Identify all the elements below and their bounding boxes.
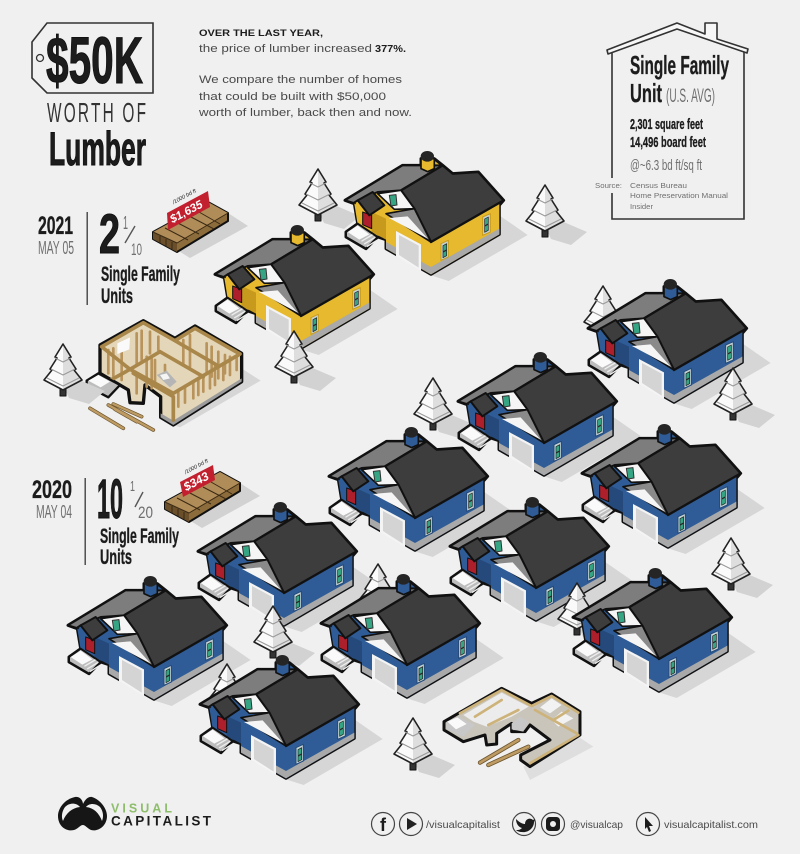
panel: single family unit house outline: Census Bureau	[630, 181, 687, 190]
panel: single family unit house outline: @~6.3 bd ft/sq ft	[630, 157, 703, 174]
icon: lumber bundle 2020: $343	[180, 469, 211, 494]
social links: visualcapitalist.com	[664, 819, 758, 831]
logo: Visual Capitalist	[58, 797, 212, 830]
icon: tree	[275, 331, 336, 391]
house: blue 8	[321, 574, 504, 704]
intro text: that could be built with $50,000	[199, 91, 386, 103]
icon: tree	[299, 169, 360, 229]
icon: facebook	[372, 812, 394, 836]
icon: lumber bundle 2020: /1000 bd ft	[183, 458, 210, 476]
icon: lumber bundle 2020	[165, 458, 260, 528]
stat: 2020: 2020	[32, 476, 72, 504]
house: blue 3	[329, 427, 512, 557]
icon: tree	[208, 664, 269, 724]
stat: 2020: Single Family	[100, 525, 179, 548]
house under construction: framing	[87, 321, 261, 430]
icon: lumber bundle 2021: /1000 bd ft	[171, 188, 198, 206]
icon: tree	[584, 286, 645, 346]
stat: 2021: MAY 05	[38, 238, 74, 258]
stat: 2021: 10	[131, 240, 142, 259]
stat: 2021: 2	[99, 202, 120, 265]
icon: tree	[712, 538, 773, 598]
stat: 2021	[38, 202, 180, 308]
social links: @visualcap	[570, 819, 623, 831]
house: blue 5	[198, 502, 381, 632]
stat: 2020	[32, 467, 179, 569]
logo: Visual Capitalist: VISUAL	[111, 802, 172, 816]
panel: single family unit house outline	[595, 23, 748, 219]
house: blue 10	[200, 655, 383, 785]
stat: 2020: 20	[138, 503, 153, 522]
stat: 2020: 1	[130, 478, 135, 495]
stat: 2021: 1	[123, 213, 128, 233]
price tag outline	[32, 23, 153, 93]
panel: single family unit house outline: (U.S. AVG)	[666, 86, 715, 107]
stat: 2021: Single Family	[101, 263, 180, 286]
icon: youtube	[400, 812, 422, 836]
title: $50K worth of lumber: $50K	[46, 23, 143, 97]
house: blue 9	[68, 576, 251, 706]
icon: instagram	[542, 812, 564, 836]
stat: 2021: 2021	[38, 212, 73, 240]
icon: tree	[714, 368, 775, 428]
house: blue 6	[450, 497, 633, 627]
social links: f	[380, 815, 387, 835]
house under construction: foundation	[444, 688, 593, 780]
intro text: 377%.	[375, 44, 406, 55]
stat: 2020: Units	[100, 546, 132, 569]
house: blue 2	[458, 352, 641, 482]
icon: tree	[558, 583, 619, 643]
stat: 2020: 10	[97, 467, 123, 530]
house: blue 1	[588, 279, 771, 409]
icon: tree	[414, 378, 475, 438]
icon: tree	[526, 185, 587, 245]
stat: 2020: MAY 04	[36, 502, 72, 522]
intro text: We compare the number of homes	[199, 74, 403, 86]
icon: lumber bundle 2021: $1,635	[167, 199, 205, 226]
logo: Visual Capitalist: CAPITALIST	[111, 814, 212, 828]
house: yellow back	[345, 151, 528, 281]
panel: single family unit house outline: Unit	[630, 78, 662, 108]
title: $50K worth of lumber: Lumber	[49, 122, 146, 175]
panel: single family unit house outline: Insider	[630, 202, 654, 211]
logo mark	[58, 797, 107, 830]
intro text	[198, 28, 412, 119]
social links: /visualcapitalist	[426, 819, 500, 831]
panel: single family unit house outline: 2,301 square feet	[630, 116, 703, 133]
icon: twitter	[512, 812, 536, 836]
icon: cursor	[636, 812, 660, 836]
icon: tree	[44, 344, 105, 404]
house outline	[612, 50, 744, 219]
intro text: worth of lumber, back then and now.	[198, 107, 412, 119]
social links	[372, 812, 758, 836]
panel: single family unit house outline: Source:	[595, 181, 622, 190]
panel: single family unit house outline: 14,496 board feet	[630, 134, 706, 151]
house: blue 4	[582, 424, 765, 554]
house: yellow front	[215, 225, 398, 355]
panel: single family unit house outline: Single Family	[630, 50, 729, 80]
house: blue 7	[573, 568, 756, 698]
icon: tree	[359, 564, 420, 624]
intro text: OVER THE LAST YEAR,	[199, 28, 323, 39]
title: $50K worth of lumber	[32, 23, 153, 175]
icon: tree	[394, 718, 455, 778]
icon: tree	[254, 606, 315, 666]
panel: single family unit house outline: Home Preservation Manual	[630, 191, 728, 200]
icon: lumber bundle 2021	[153, 188, 248, 258]
intro text: the price of lumber increased	[199, 43, 372, 55]
title: $50K worth of lumber: WORTH OF	[47, 97, 146, 128]
stat: 2021: Units	[101, 285, 133, 308]
